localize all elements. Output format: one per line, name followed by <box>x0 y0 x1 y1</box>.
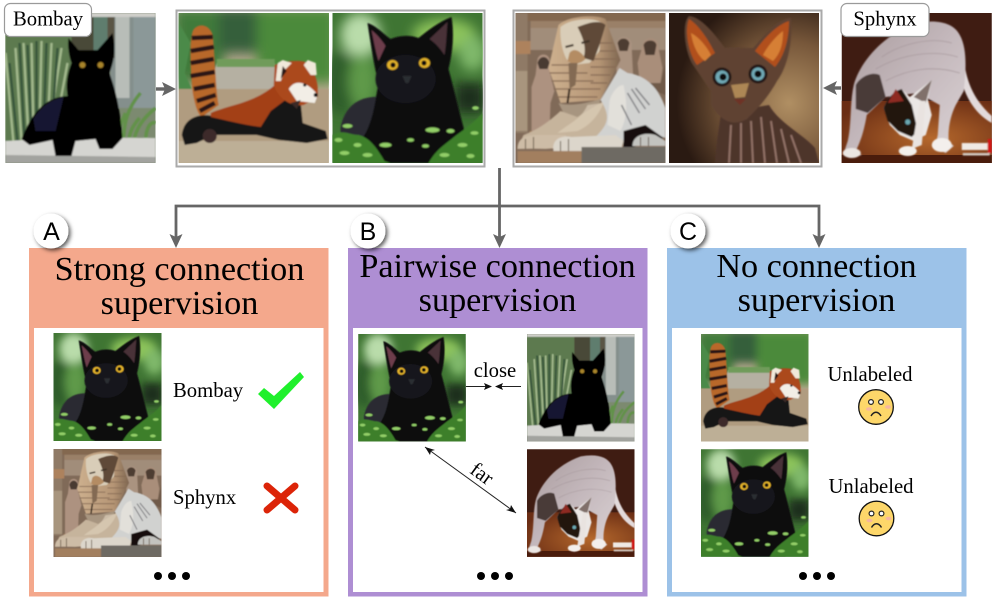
panel B body <box>353 328 642 592</box>
Sphynx label: Sphynx <box>853 8 917 30</box>
panel A heading: supervision <box>101 285 258 322</box>
panel C heading: supervision <box>738 282 895 319</box>
icon: red cross <box>267 486 295 510</box>
label: close: close <box>474 360 516 382</box>
panel A heading <box>55 251 304 322</box>
Sphynx reference photo <box>842 13 992 163</box>
badge A: A <box>43 218 60 246</box>
arrows: close <box>466 383 521 390</box>
label: Bombay: Bombay <box>173 380 244 402</box>
image: real Bombay cat <box>527 334 634 442</box>
image: generated black cat <box>324 13 486 163</box>
badge A <box>34 214 68 248</box>
arrow: Bombay photo to generated images <box>156 82 176 96</box>
Bombay label <box>4 4 92 36</box>
label: Sphynx: Sphynx <box>173 487 237 509</box>
ellipsis <box>477 572 513 580</box>
image: sphinx statue <box>516 13 666 163</box>
image: sphinx statue <box>54 449 162 557</box>
panel C heading: No connection <box>716 248 917 285</box>
arrow: far <box>425 447 516 513</box>
label: Unlabeled: Unlabeled <box>827 364 913 386</box>
image: red panda <box>174 8 337 163</box>
panel C: no connection supervision <box>667 248 966 596</box>
Sphynx label <box>841 4 929 36</box>
image: red panda <box>697 330 814 442</box>
ellipsis <box>799 572 835 580</box>
panel A: strong connection supervision <box>29 248 328 596</box>
badge B: B <box>360 218 376 246</box>
panel B heading: supervision <box>419 282 576 319</box>
panel C heading <box>716 248 917 319</box>
panel C body <box>672 328 962 592</box>
Bombay reference photo <box>6 13 156 163</box>
image: black cat <box>695 449 811 557</box>
panel B: pairwise connection supervision <box>348 248 648 596</box>
connector arrows to the three panels <box>170 168 826 248</box>
badge C: C <box>679 218 697 246</box>
label: far: far <box>466 458 497 490</box>
panel A heading: Strong connection <box>55 251 304 288</box>
image: generated sphynx cat <box>669 13 819 163</box>
panel A body <box>34 328 324 592</box>
image: black cat <box>353 334 469 442</box>
image: black cat <box>48 333 164 441</box>
ellipsis <box>154 572 190 580</box>
panel B heading <box>359 248 636 319</box>
frame: generated Sphynx-related images <box>514 10 822 166</box>
label: Unlabeled: Unlabeled <box>828 476 914 498</box>
badge C <box>670 214 706 248</box>
Bombay label: Bombay <box>13 8 84 30</box>
arrow: Sphynx photo to generated images <box>823 81 841 95</box>
image: real Sphynx cat <box>527 449 634 557</box>
icon: green check <box>258 372 304 409</box>
icon: sad face <box>859 390 893 424</box>
frame: generated Bombay-related images <box>174 8 486 166</box>
panel B heading: Pairwise connection <box>359 248 636 285</box>
badge B <box>350 214 386 248</box>
icon: sad face <box>859 501 894 536</box>
